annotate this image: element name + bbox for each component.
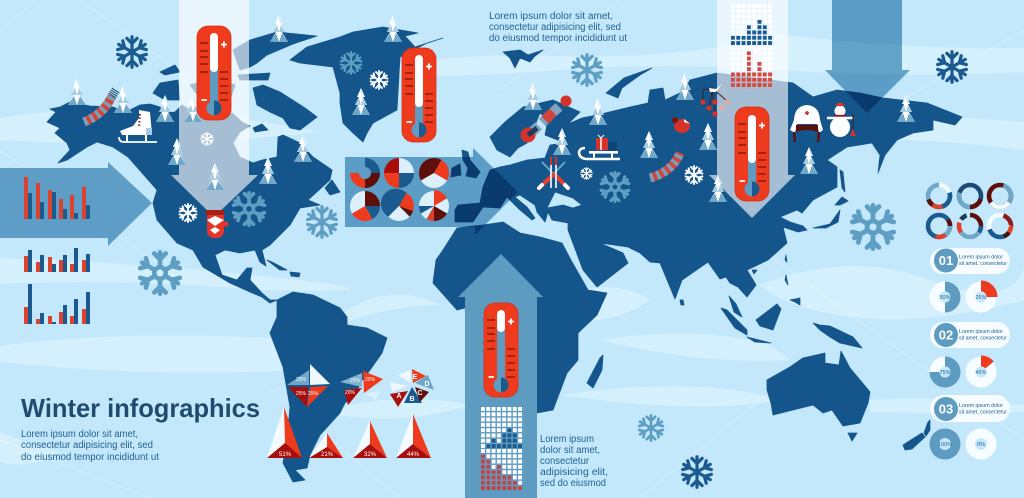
icon: striped mitten over Scandinavia: [520, 96, 572, 142]
triangle pinwheel chart: 20%: [365, 377, 376, 383]
text block: bottom centre: consectetur: [540, 456, 590, 467]
lettered pinwheel A-E: C: [417, 390, 423, 397]
arrow: white down right: [709, 0, 795, 218]
arrow: top right down: [825, 0, 910, 113]
British Isles: [451, 150, 480, 178]
dot matrix: bottom red: [481, 449, 523, 491]
icon: ice skate: [119, 110, 157, 142]
icon: scarf 1: [84, 90, 116, 122]
lettered pinwheel A-E: B: [409, 396, 415, 403]
pill 02: Lorem ipsum dolor: [959, 329, 1003, 335]
text block: top centre: [489, 11, 627, 44]
snowflakes: [116, 37, 968, 487]
pill 03: 03: [939, 402, 953, 416]
dot matrix: bottom blue: [481, 407, 523, 449]
triangle pinwheel chart: 20%: [345, 390, 356, 396]
text block: bottom left: [21, 429, 159, 463]
pill 03: [930, 395, 1010, 422]
lettered pinwheel A-E: D: [424, 381, 430, 388]
pill 02: [930, 322, 1010, 348]
text block: top centre: consectetur adipisicing elit, sed: [489, 22, 621, 33]
donut 100%: 100%: [938, 442, 952, 448]
pie chart 1: [350, 158, 380, 188]
Australia and Oceania: [767, 351, 930, 450]
text block: bottom left: Lorem ipsum dolor sit amet,: [21, 429, 138, 440]
pill 03: sit amet, consectetur: [959, 410, 1007, 416]
title: Winter infographics: [21, 393, 260, 423]
pie chart 2: [384, 158, 414, 188]
Greenland: [290, 27, 443, 142]
triangle chart 21%: [309, 433, 343, 458]
pill 03: Lorem ipsum dolor: [959, 403, 1003, 409]
triangle chart 44%: [396, 414, 431, 458]
pie chart 3: [419, 158, 449, 188]
icon: scarf 2: [650, 153, 680, 178]
bar chart 3: [24, 284, 90, 324]
pill 02: sit amet, consectetur: [959, 336, 1007, 342]
thermometer 1: [197, 26, 231, 120]
lettered pinwheel A-E: A: [396, 393, 402, 400]
donut 50%: [930, 282, 960, 312]
donut 25%: 25%: [975, 295, 987, 301]
icon: ushanka hat: [790, 105, 823, 142]
arrow: bottom up: [458, 254, 543, 498]
trees: [68, 15, 915, 202]
arrow: left pointing right: [0, 162, 152, 246]
donut 100%: [930, 428, 960, 460]
triangle chart 51%: [267, 407, 302, 458]
donut 25%: [966, 282, 996, 312]
donut 45%: 45%: [975, 370, 987, 376]
Eurasia: [455, 73, 962, 299]
dot matrix: top red: [731, 46, 773, 88]
text block: top centre: Lorem ipsum dolor sit amet,: [489, 11, 613, 22]
icon: rowan berries: [700, 84, 730, 117]
pill 01: sit amet, consectetur: [959, 261, 1007, 267]
triangle chart 32%: [353, 421, 387, 458]
text block: bottom left: do eiusmod tempor incididunt ut: [21, 452, 159, 463]
donut 0%: [966, 428, 996, 460]
Arctic Canada islands: [153, 32, 340, 277]
arrow: pie chart panel: [345, 148, 518, 235]
pie chart 6: [419, 190, 449, 221]
donut 75%: [930, 356, 960, 388]
ring charts: [928, 185, 1011, 237]
triangle chart 21%: 21%: [321, 452, 334, 458]
paper-boat chart: [287, 364, 330, 407]
paper-boat chart: 25%: [296, 391, 307, 397]
pill 02: 02: [939, 328, 953, 342]
Africa: [433, 222, 607, 413]
thermometer 4: [484, 303, 518, 397]
text block: top centre: do eiusmod tempor incididunt ut: [489, 33, 627, 44]
North America: [47, 102, 332, 303]
icon: bullfinch: [672, 117, 690, 133]
pill 01: 01: [939, 253, 953, 268]
icon: mitten: [206, 210, 229, 238]
text block: bottom centre: dolor sit amet,: [540, 445, 600, 456]
South America: [270, 292, 387, 482]
paper-boat chart: 25%: [296, 377, 307, 383]
lettered pinwheel A-E: [390, 369, 434, 407]
paper-boat chart: 25%: [308, 391, 319, 397]
pill 01: [930, 248, 1010, 274]
Asian islands: [503, 50, 862, 388]
icon: snowman: [827, 102, 856, 137]
text block: bottom centre: [540, 434, 608, 489]
triangle pinwheel chart: 20%: [350, 378, 361, 384]
pie chart 4: [350, 191, 380, 221]
text block: bottom left: consectetur adipisicing elit, sed: [21, 440, 153, 451]
bar chart 2: [24, 248, 90, 272]
donut 0%: 0%: [977, 442, 985, 448]
thermometer 2: [402, 48, 436, 142]
icon: skis: [539, 157, 568, 188]
arrow: white down left: [171, 0, 258, 217]
text block: bottom centre: sed do eiusmod: [540, 478, 606, 489]
lettered pinwheel A-E: E: [413, 374, 418, 381]
triangle chart 32%: 32%: [364, 452, 377, 458]
donut 45%: [966, 356, 996, 388]
pie chart 5: [381, 189, 414, 221]
thermometer 3: [735, 107, 769, 201]
triangle pinwheel chart: [340, 371, 383, 405]
text block: bottom centre: Lorem ipsum: [540, 434, 594, 445]
icon: sled with gift: [579, 135, 620, 159]
donut 50%: 50%: [939, 295, 951, 301]
triangle chart 44%: 44%: [407, 452, 420, 458]
bar chart 1: [24, 177, 90, 219]
donut 75%: 75%: [939, 370, 951, 376]
triangle chart 51%: 51%: [279, 452, 292, 458]
text block: bottom centre: adipisicing elit,: [540, 467, 608, 478]
pill 01: Lorem ipsum dolor: [959, 254, 1003, 260]
dot matrix: top blue: [731, 4, 773, 46]
